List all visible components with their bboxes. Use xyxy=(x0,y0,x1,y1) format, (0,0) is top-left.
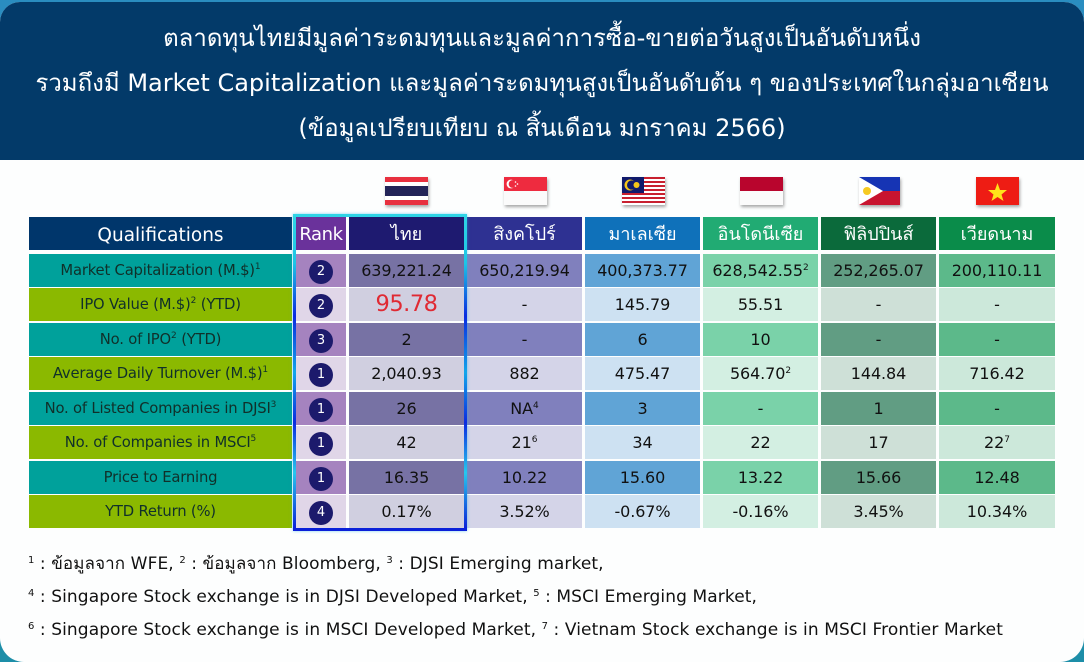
row: YTD return xyxy=(29,495,1055,528)
row: YTD return: 10.34% xyxy=(967,502,1027,521)
table header row: อินโดนีเซีย xyxy=(718,224,803,245)
icon: Indonesia flag xyxy=(740,177,783,205)
row: market capitalization: 639,221.24 xyxy=(361,261,452,280)
row: listed companies in DJSI: 26 xyxy=(396,399,417,418)
row: companies in MSCI: 34 xyxy=(632,433,653,452)
row: price to earning: 15.66 xyxy=(856,468,901,487)
row: companies in MSCI: 1 xyxy=(317,436,325,450)
table header row: ไทย xyxy=(391,224,422,245)
row: YTD return: 3.52% xyxy=(499,502,550,521)
row: average daily turnover: Average Daily Turnover (M.$)1 xyxy=(53,365,268,382)
row: YTD return: 3.45% xyxy=(853,502,904,521)
icon: Philippines flag xyxy=(859,177,900,205)
row: market capitalization: 252,265.07 xyxy=(833,261,924,280)
row: IPO value: - xyxy=(994,295,1000,314)
row: listed companies in DJSI: No. of Listed Companies in DJSI3 xyxy=(45,400,276,417)
row: average daily turnover: 1 xyxy=(317,366,325,382)
row: IPO value: 55.51 xyxy=(738,295,783,314)
footnote line 2: 4 : Singapore Stock exchange is in DJSI Developed Market, 5 : MSCI Emerging Market, xyxy=(28,587,757,607)
table header row: Qualifications xyxy=(97,225,224,246)
row: price to earning: 15.60 xyxy=(620,468,665,487)
row: number of IPO: - xyxy=(994,330,1000,349)
panel: title banner xyxy=(0,2,1084,160)
row: YTD return: -0.16% xyxy=(732,502,788,521)
row: average daily turnover: 144.84 xyxy=(851,364,906,383)
row: YTD return: YTD Return (%) xyxy=(105,503,216,520)
row: market capitalization: 650,219.94 xyxy=(479,261,570,280)
table header row: ฟิลิปปินส์ xyxy=(844,224,913,245)
row: average daily turnover: 716.42 xyxy=(969,364,1025,383)
row: IPO value: - xyxy=(876,295,881,314)
row: number of IPO: - xyxy=(876,330,881,349)
row: IPO value xyxy=(29,288,1055,321)
row: average daily turnover: 475.47 xyxy=(615,364,670,383)
table header row xyxy=(29,217,1055,250)
row: listed companies in DJSI: NA4 xyxy=(510,399,539,418)
row: YTD return: 0.17% xyxy=(381,502,432,521)
row: number of IPO xyxy=(29,323,1055,356)
row: companies in MSCI xyxy=(29,426,1055,459)
row: number of IPO: No. of IPO2 (YTD) xyxy=(100,331,221,348)
title line 2: รวมถึงมี Market Capitalization และมูลค่าระดมทุนสูงเป็นอันดับต้น ๆ ของประเทศในกลุ่มอาเซียน xyxy=(35,69,1049,97)
table header row: เวียดนาม xyxy=(961,224,1033,245)
row: companies in MSCI: 227 xyxy=(984,433,1010,452)
row: companies in MSCI: 17 xyxy=(868,433,889,452)
row: price to earning: Price to Earning xyxy=(104,469,217,486)
footnote line 3: 6 : Singapore Stock exchange is in MSCI Developed Market, 7 : Vietnam Stock exchange is in MSCI Frontier Market xyxy=(28,620,1003,640)
row: IPO value: 2 xyxy=(317,298,325,312)
icon: Vietnam flag xyxy=(976,177,1019,205)
icon: Singapore flag xyxy=(504,177,547,205)
row: YTD return: 4 xyxy=(317,504,325,520)
row: companies in MSCI: 22 xyxy=(750,433,771,452)
row: number of IPO: 3 xyxy=(317,332,325,348)
row: market capitalization: 400,373.77 xyxy=(597,261,688,280)
table header row: สิงคโปร์ xyxy=(493,224,556,245)
table header row: Rank xyxy=(299,224,343,245)
row: listed companies in DJSI: - xyxy=(758,399,763,418)
row: market capitalization: Market Capitalization (M.$)1 xyxy=(60,262,261,279)
row: price to earning: 16.35 xyxy=(384,468,429,487)
table header row: มาเลเซีย xyxy=(608,224,677,245)
row: listed companies in DJSI: 1 xyxy=(317,402,325,416)
row: average daily turnover: 2,040.93 xyxy=(371,364,442,383)
icon: Malaysia flag xyxy=(622,177,665,205)
row: IPO value: 145.79 xyxy=(615,295,670,314)
row: listed companies in DJSI xyxy=(29,392,1055,425)
row: price to earning: 13.22 xyxy=(738,468,783,487)
highlight frame around Thailand column xyxy=(293,214,467,531)
row: number of IPO: 6 xyxy=(637,330,648,349)
row: market capitalization: 2 xyxy=(317,264,325,278)
row: companies in MSCI: 216 xyxy=(512,433,537,452)
row: companies in MSCI: 42 xyxy=(396,433,417,452)
row: listed companies in DJSI: 3 xyxy=(637,399,648,418)
row: IPO value: 95.78 xyxy=(376,291,437,317)
row: average daily turnover: 882 xyxy=(509,364,540,383)
row: companies in MSCI: No. of Companies in MSCI5 xyxy=(65,434,256,451)
row: listed companies in DJSI: - xyxy=(994,399,1000,418)
row: IPO value: IPO Value (M.$)2 (YTD) xyxy=(80,296,241,313)
row: number of IPO: 10 xyxy=(750,330,771,349)
title line 3: (ข้อมูลเปรียบเทียบ ณ สิ้นเดือน มกราคม 2566) xyxy=(298,114,786,142)
row: average daily turnover xyxy=(29,357,1055,390)
title line 1: ตลาดทุนไทยมีมูลค่าระดมทุนและมูลค่าการซื้อ-ขายต่อวันสูงเป็นอันดับหนึ่ง xyxy=(163,24,921,52)
row: IPO value: - xyxy=(522,295,527,314)
row: price to earning xyxy=(29,461,1055,494)
row: number of IPO: - xyxy=(522,330,527,349)
row: market capitalization: 628,542.552 xyxy=(712,261,809,280)
row: price to earning: 12.48 xyxy=(974,468,1020,487)
row: price to earning: 10.22 xyxy=(502,468,547,487)
row: average daily turnover: 564.702 xyxy=(730,364,791,383)
row: market capitalization: 200,110.11 xyxy=(952,261,1042,280)
row: listed companies in DJSI: 1 xyxy=(873,399,884,418)
row: price to earning: 1 xyxy=(317,470,325,486)
row: YTD return: -0.67% xyxy=(614,502,670,521)
icon: Thailand flag xyxy=(385,177,428,205)
row: number of IPO: 2 xyxy=(401,330,412,349)
row: market capitalization xyxy=(29,254,1055,287)
footnote line 1: 1 : ข้อมูลจาก WFE, 2 : ข้อมูลจาก Bloomberg, 3 : DJSI Emerging market, xyxy=(28,554,604,574)
